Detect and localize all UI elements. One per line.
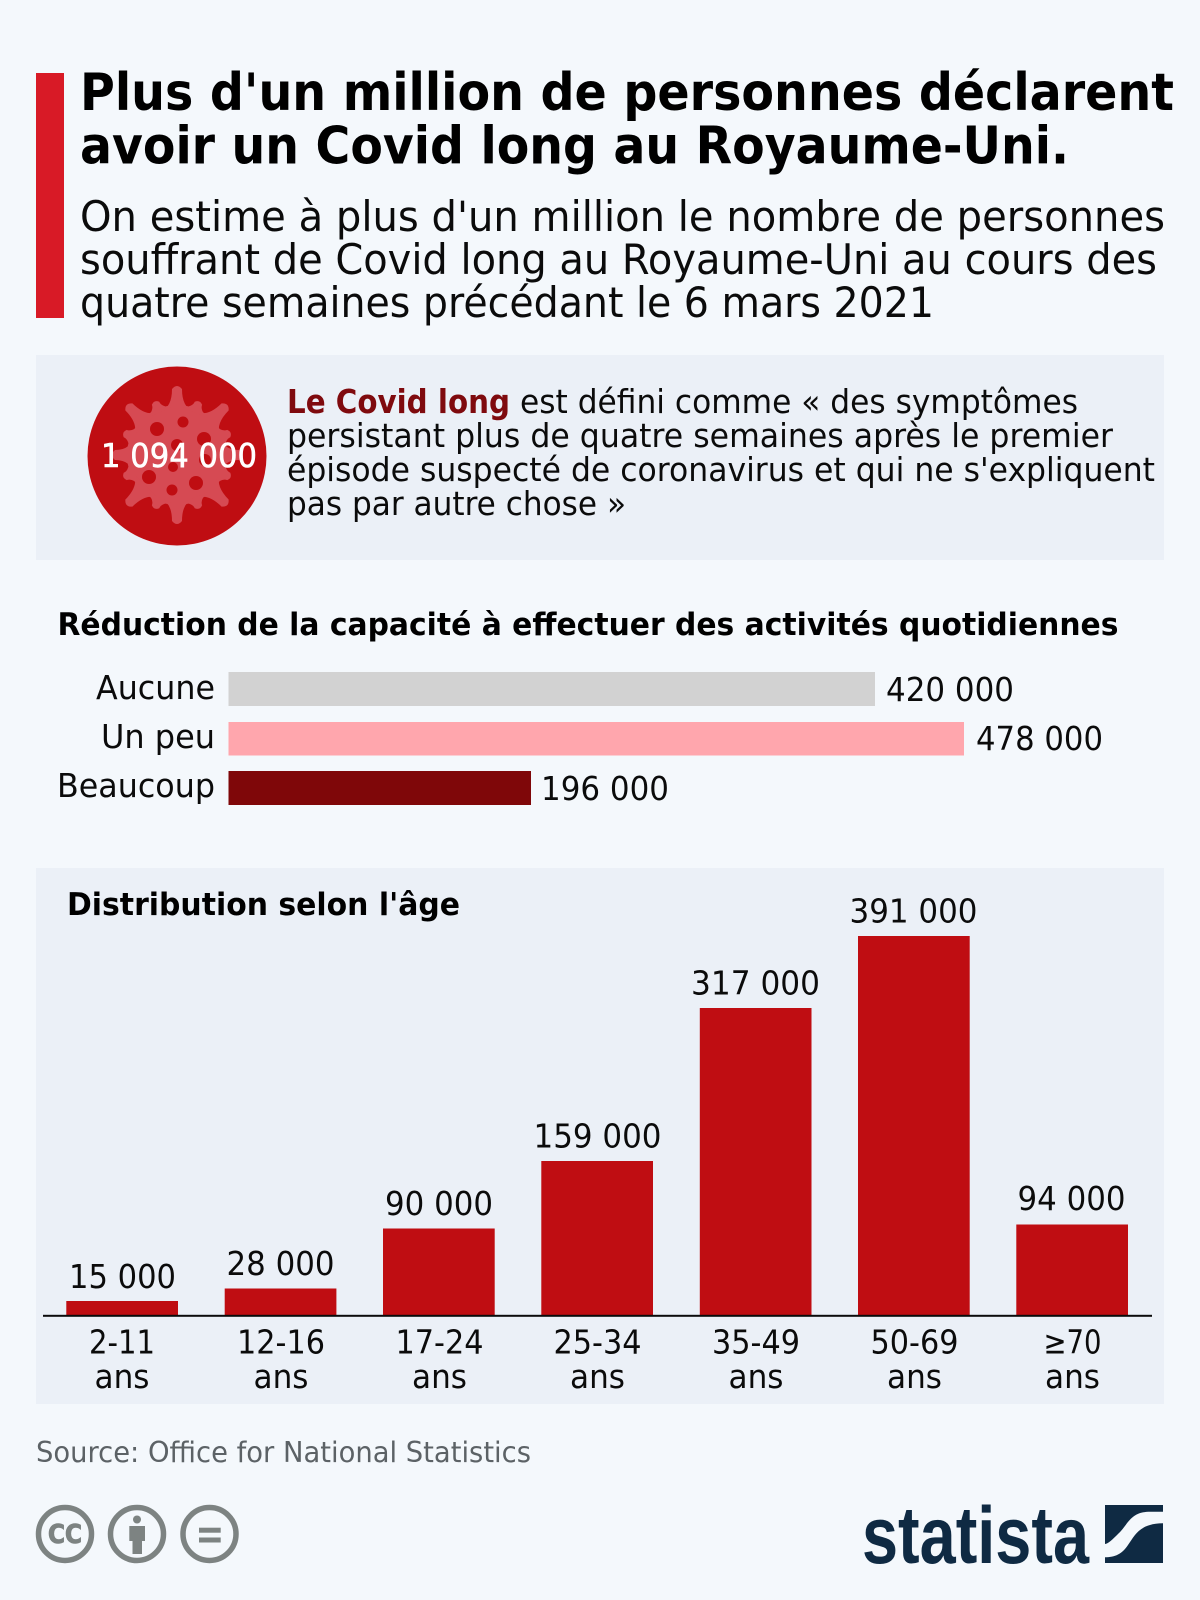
panel: age distribution (36, 868, 1164, 1404)
icon: red virus circle with total: 1 094 000 (101, 436, 257, 475)
column: 12-16 ans: ans (254, 1358, 308, 1396)
definition text: épisode suspecté de coronavirus et qui ne s'expliquent (287, 450, 1155, 489)
column: 35-49 ans (691, 964, 820, 1396)
icon: creative commons: CC (48, 1520, 82, 1550)
bar: Un peu: Un peu (101, 718, 215, 756)
column: 35-49 ans: 317 000 (691, 964, 820, 1002)
title accent bar (36, 73, 64, 318)
bar: Beaucoup: Beaucoup (57, 767, 215, 805)
definition text: persistant plus de quatre semaines après le premier (287, 416, 1113, 455)
definition text (287, 382, 1155, 523)
subtitle (80, 192, 1165, 327)
column: 2-11 ans (66, 1258, 178, 1396)
title (80, 63, 1174, 176)
logo: statista: statista (862, 1491, 1090, 1581)
bar: Aucune: 420 000 (886, 671, 1014, 709)
icon: red virus circle with total (88, 366, 266, 546)
column: 35-49 ans: 35-49 (712, 1324, 800, 1362)
column: 70 ans et plus: ans (1045, 1358, 1100, 1396)
column: 50-69 ans: 391 000 (850, 892, 978, 930)
bar: Un peu (101, 718, 1103, 758)
column: 2-11 ans: 15 000 (69, 1258, 176, 1296)
column: 12-16 ans: 12-16 (237, 1324, 325, 1362)
subtitle: souffrant de Covid long au Royaume-Uni au cours des (80, 235, 1157, 284)
title: avoir un Covid long au Royaume-Uni. (80, 116, 1069, 176)
column: 70 ans et plus: ≥70 (1044, 1324, 1102, 1362)
column: 50-69 ans: ans (887, 1358, 942, 1396)
heading: age distribution: Distribution selon l'âge (67, 887, 460, 923)
subtitle: quatre semaines précédant le 6 mars 2021 (80, 278, 934, 327)
column: 17-24 ans: 17-24 (396, 1324, 484, 1362)
source: Source: Office for National Statistics (36, 1436, 531, 1469)
icon: no derivatives (183, 1508, 236, 1560)
bar: Beaucoup: 196 000 (541, 770, 669, 808)
column: 70 ans et plus: 94 000 (1018, 1180, 1126, 1218)
definition text: pas par autre chose » (287, 484, 626, 523)
column: 70 ans et plus (1016, 1180, 1128, 1396)
column: 17-24 ans: ans (412, 1358, 467, 1396)
definition text: Le Covid long (287, 382, 510, 421)
bar: Beaucoup (57, 767, 669, 808)
bar: Aucune: Aucune (96, 669, 215, 707)
column: 2-11 ans: ans (94, 1358, 150, 1396)
column: 2-11 ans: 2-11 (89, 1324, 155, 1362)
subtitle: On estime à plus d'un million le nombre de personnes (80, 192, 1165, 241)
column: 25-34 ans: ans (570, 1358, 625, 1396)
definition text: est défini comme « des symptômes (520, 382, 1078, 421)
column: 50-69 ans (850, 892, 978, 1396)
bar: Aucune (96, 669, 1014, 709)
column: 17-24 ans (383, 1185, 495, 1396)
column: 25-34 ans: 25-34 (554, 1324, 642, 1362)
bar: Un peu: 478 000 (976, 720, 1103, 758)
bar chart: daily activities (57, 669, 1103, 808)
column: 25-34 ans (534, 1118, 662, 1396)
column: 25-34 ans: 159 000 (534, 1118, 662, 1156)
heading: daily activities: Réduction de la capacité à effectuer des activités quotidiennes (58, 607, 1118, 643)
column: 17-24 ans: 90 000 (385, 1185, 493, 1223)
column: 12-16 ans (225, 1245, 336, 1396)
panel: definition (36, 355, 1164, 560)
icon: attribution (110, 1508, 164, 1560)
column: 50-69 ans: 50-69 (870, 1324, 958, 1362)
column: 35-49 ans: ans (728, 1358, 784, 1396)
column: 12-16 ans: 28 000 (226, 1245, 334, 1283)
icon: creative commons (38, 1508, 92, 1560)
